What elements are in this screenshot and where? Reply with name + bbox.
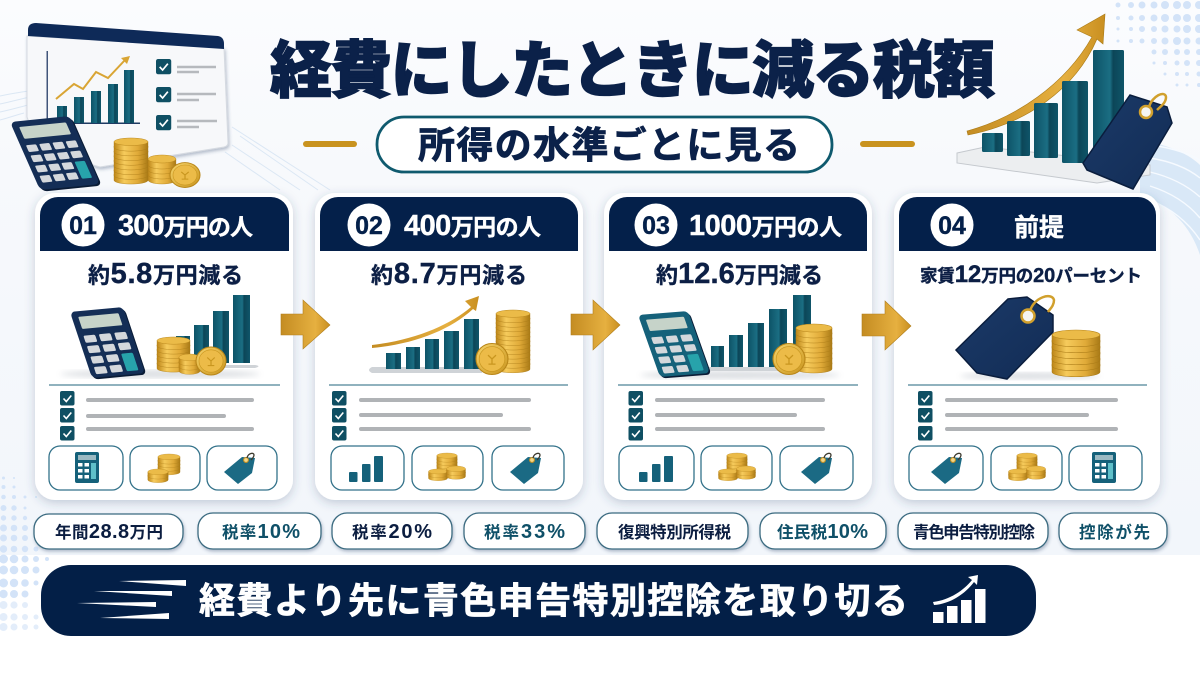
chip: annual amount: 年間28.8万円 <box>55 521 163 543</box>
price tag <box>1083 94 1172 189</box>
icon row <box>619 446 853 490</box>
chip: deduction first <box>1059 513 1167 549</box>
checklist <box>918 391 1116 440</box>
illustration: teal calculator, bars, coins <box>638 295 840 379</box>
illustration: calculator, coins, bars <box>60 295 260 380</box>
checklist <box>60 391 252 440</box>
icon row <box>49 446 277 490</box>
card header: 前提 <box>1014 214 1064 242</box>
result headline: 約8.7万円減る <box>371 258 527 290</box>
banner text: 経費より先に青色申告特別控除を取り切る <box>199 580 908 621</box>
conclusion banner <box>41 565 1036 636</box>
chip: tax 20 <box>332 513 452 549</box>
chip: reconstruction tax: 復興特別所得税 <box>618 522 732 542</box>
result headline: 約5.8万円減る <box>88 258 243 290</box>
card header: 01 <box>69 212 97 240</box>
chip: tax 33 <box>464 513 585 549</box>
chip: tax 10: 税率10% <box>222 521 300 543</box>
card header <box>40 197 289 251</box>
chip: tax 10 <box>198 513 321 549</box>
checklist <box>332 391 529 440</box>
icon: speed streaks <box>77 580 186 619</box>
chip: tax 33: 税率33% <box>484 521 565 543</box>
card header: 1000万円の人 <box>689 210 842 242</box>
icon row <box>331 446 564 490</box>
chip: tax 20: 税率20% <box>352 521 432 543</box>
chip: blue return deduction <box>898 513 1048 549</box>
arrow 3 <box>862 301 911 350</box>
card header: 03 <box>642 212 670 240</box>
chip: reconstruction tax <box>597 513 748 549</box>
chip: annual amount <box>34 514 183 549</box>
card header: 300万円の人 <box>118 210 253 242</box>
premise headline: 家賃12万円の20パーセント <box>920 261 1142 288</box>
illustration: tag and coins <box>956 296 1100 380</box>
card header: 02 <box>355 212 383 240</box>
panel: card 02 <box>315 193 583 500</box>
icon: gold coins <box>114 138 200 188</box>
dashboard panel <box>27 23 228 167</box>
keyword chips <box>34 513 1167 549</box>
icon: calculator <box>10 116 102 192</box>
panel: card 01 <box>35 193 293 500</box>
bars <box>982 50 1124 163</box>
card header: 04 <box>938 212 966 240</box>
platform <box>957 147 1150 183</box>
decorative gold dashes <box>303 141 915 147</box>
rising arrow <box>967 14 1105 135</box>
result headline: 約12.6万円減る <box>656 258 823 290</box>
subtitle pill <box>377 117 832 172</box>
subtitle pill: 所得の水準ごとに見る <box>418 125 800 166</box>
icon row <box>909 446 1142 490</box>
title: 経費にしたときに減る税額 <box>270 37 995 106</box>
card header <box>899 197 1156 251</box>
icon: growth bars <box>933 575 986 623</box>
illustration: dashboard with calculator and coins <box>10 23 228 192</box>
illustration: rising bars with arrow and tag <box>957 14 1172 189</box>
chip: resident tax: 住民税10% <box>777 521 868 543</box>
arrow 1 <box>281 300 330 349</box>
panel: card 04 <box>894 193 1160 500</box>
illustration: rising bars and coins <box>369 296 530 374</box>
chip: blue return deduction: 青色申告特別控除 <box>913 522 1036 542</box>
arrow 2 <box>571 300 620 350</box>
panel: card 03 <box>604 193 872 500</box>
card header <box>320 197 578 251</box>
chip: deduction first: 控除が先 <box>1079 522 1150 542</box>
chip: resident tax <box>760 513 886 549</box>
card header: 400万円の人 <box>404 210 541 242</box>
checklist <box>628 391 823 440</box>
card header <box>609 197 867 251</box>
